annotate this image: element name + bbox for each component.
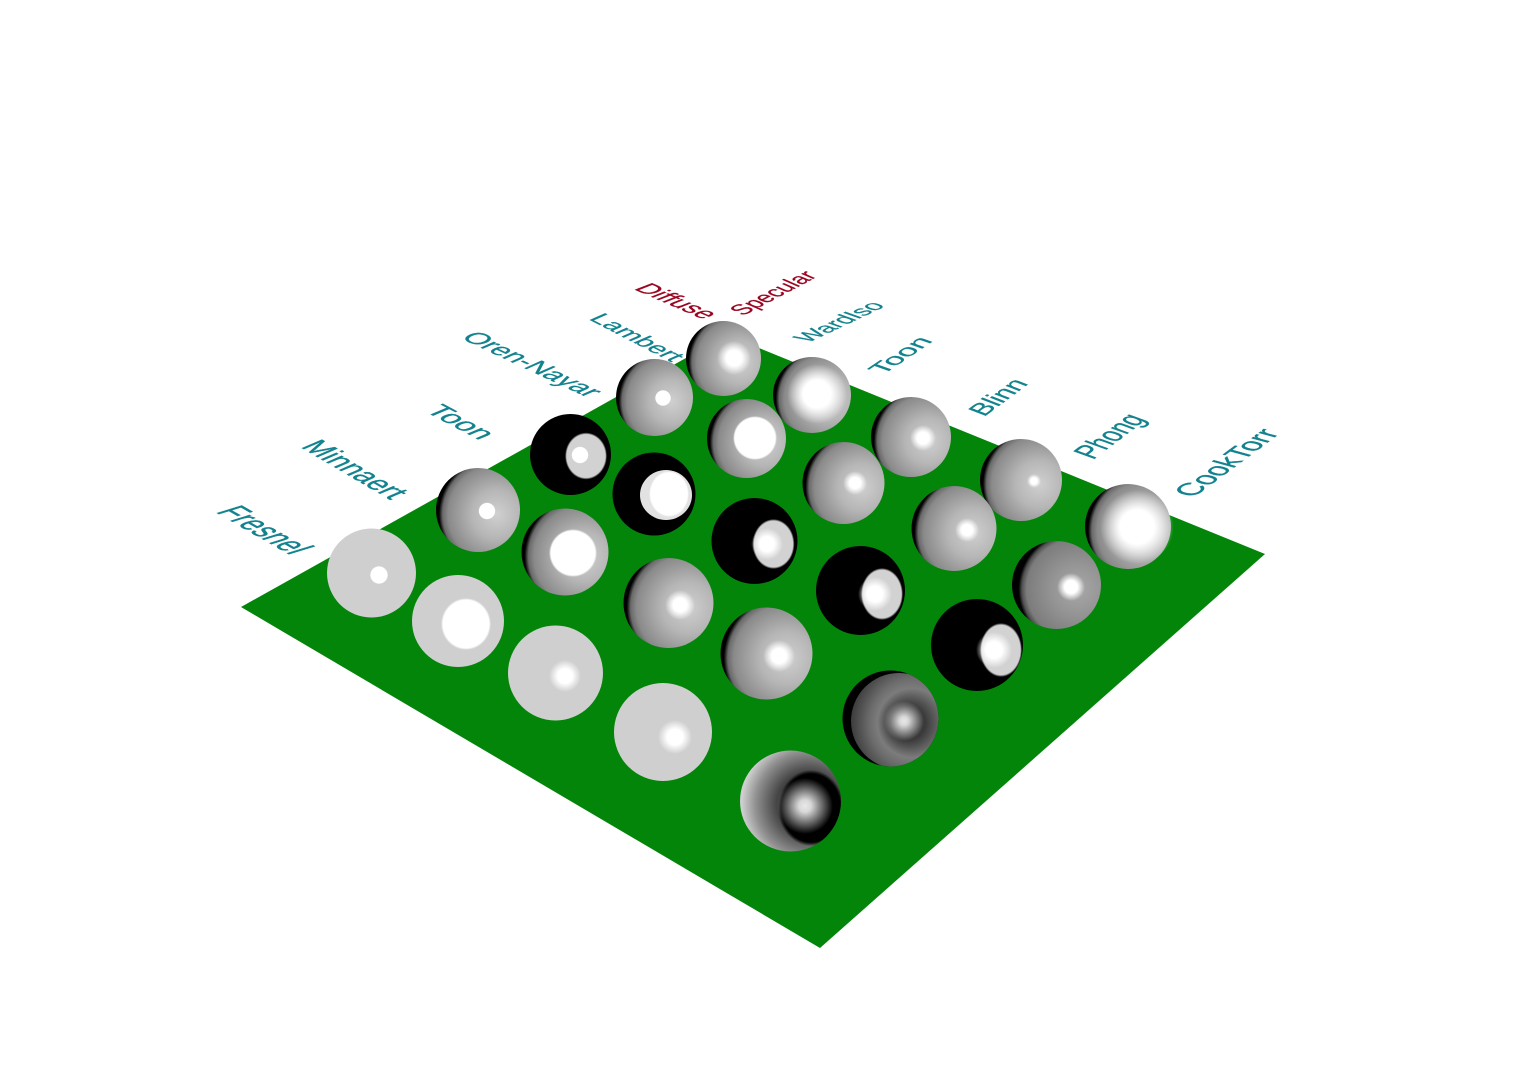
sphere: Oren-Nayar + CookTorr [1012, 541, 1101, 629]
label: Phong: Phong [1066, 410, 1153, 462]
sphere: Toon + CookTorr [931, 599, 1023, 691]
sphere: Minnaert + CookTorr [842, 670, 938, 766]
sphere: Minnaert + Phong [720, 608, 812, 700]
label: Blinn: Blinn [963, 376, 1035, 419]
heading: Diffuse: Diffuse [627, 281, 725, 322]
sphere: Oren-Nayar + Toon [707, 399, 786, 478]
sphere: Fresnel + CookTorr [740, 750, 844, 852]
shading model scene [216, 271, 1277, 948]
green ground plane [241, 335, 1265, 948]
sphere: Minnaert + Toon [522, 508, 608, 596]
sphere: Lambert + Phong [980, 439, 1062, 521]
sphere: Fresnel + Phong [614, 683, 712, 781]
sphere: Toon + Blinn [712, 498, 798, 584]
label: Lambert: Lambert [583, 310, 692, 365]
sphere: Fresnel + Toon [412, 575, 504, 667]
sphere: Oren-Nayar + Blinn [802, 442, 884, 524]
sphere: Lambert + CookTorr [1085, 484, 1174, 569]
label: Minnaert: Minnaert [293, 436, 418, 503]
label: CookTorr: CookTorr [1165, 425, 1288, 500]
sphere: Minnaert + WardIso [436, 468, 520, 552]
sphere: Fresnel + WardIso [327, 528, 416, 618]
sphere: Lambert + WardIso [686, 321, 761, 396]
label: Oren-Nayar: Oren-Nayar [454, 328, 610, 401]
label: WardIso: WardIso [786, 298, 891, 345]
sphere: Minnaert + Blinn [624, 558, 714, 648]
sphere: Toon + WardIso [530, 414, 611, 495]
heading: Specular: Specular [723, 267, 824, 318]
label: Toon diffuse: Toon [418, 402, 502, 443]
sphere: Toon + Phong [816, 546, 905, 635]
sphere: Lambert + Blinn [871, 397, 951, 477]
sphere: Fresnel + Blinn [508, 626, 603, 720]
sphere: Oren-Nayar + Phong [912, 486, 996, 571]
sphere: Lambert + Toon [773, 357, 851, 433]
sphere: Toon + Toon [612, 452, 696, 536]
label: Fresnel: Fresnel [207, 502, 321, 558]
label: Toon specular: Toon [861, 333, 939, 377]
sphere: Oren-Nayar + WardIso [616, 359, 693, 436]
